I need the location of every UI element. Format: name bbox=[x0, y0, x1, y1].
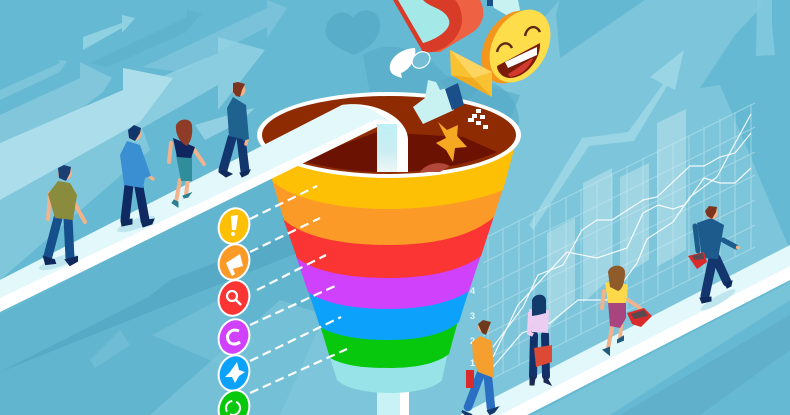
red band bbox=[283, 216, 494, 278]
number labels: 4 bbox=[470, 286, 475, 296]
stage icons bbox=[214, 204, 254, 415]
stem bbox=[377, 388, 409, 415]
bar chart bbox=[547, 109, 686, 330]
orange band bbox=[272, 175, 507, 245]
background silhouette: heart bbox=[325, 10, 380, 55]
icon: cycle bbox=[214, 386, 254, 415]
person: olive shirt bbox=[37, 165, 85, 274]
person: orange shirt with bag bbox=[462, 320, 497, 415]
path right bbox=[460, 245, 790, 415]
person: lilac blouse with bag bbox=[529, 295, 552, 385]
number labels: 3 bbox=[470, 311, 475, 321]
number labels: 2 bbox=[470, 336, 475, 346]
basket bbox=[627, 308, 652, 327]
icon: laughing emoji bbox=[469, 0, 563, 94]
green band bbox=[320, 321, 458, 368]
icon: network bbox=[468, 109, 488, 129]
icon: magnifier bbox=[214, 276, 254, 320]
person: blue shirt bbox=[115, 125, 157, 236]
basket bbox=[688, 252, 707, 269]
blue band bbox=[308, 290, 469, 340]
person: suit left bbox=[219, 82, 250, 177]
purple band bbox=[296, 255, 481, 309]
icon: star bbox=[436, 122, 467, 162]
funnel bbox=[257, 92, 521, 415]
icon: megaphone bbox=[214, 240, 254, 284]
icon: heart bbox=[393, 0, 483, 52]
icon: magnet bbox=[214, 315, 254, 359]
icon: envelope bbox=[450, 50, 492, 97]
person: woman teal shorts bbox=[169, 119, 204, 207]
icon: alert bbox=[214, 204, 254, 248]
path left with ramp into funnel bbox=[0, 104, 408, 312]
number labels: 1 bbox=[470, 358, 475, 368]
icon: thumbs up bbox=[413, 80, 464, 124]
rim bbox=[257, 92, 521, 178]
rising arrow bbox=[529, 50, 684, 230]
dashed connector lines bbox=[250, 186, 347, 393]
funnel interior bbox=[262, 96, 516, 174]
person: yellow blouse with basket bbox=[602, 266, 652, 354]
background arrows top-left bbox=[0, 0, 287, 280]
yellow band bbox=[260, 135, 518, 209]
icon: chat bubbles bbox=[390, 48, 433, 78]
chart trend lines bbox=[493, 114, 751, 367]
icon: small thumb bbox=[487, 0, 520, 17]
person: suit right with basket bbox=[688, 206, 740, 313]
pale band bbox=[329, 352, 448, 393]
chart grid bbox=[483, 103, 755, 383]
number labels bbox=[470, 286, 475, 368]
icon: star bbox=[214, 351, 254, 395]
